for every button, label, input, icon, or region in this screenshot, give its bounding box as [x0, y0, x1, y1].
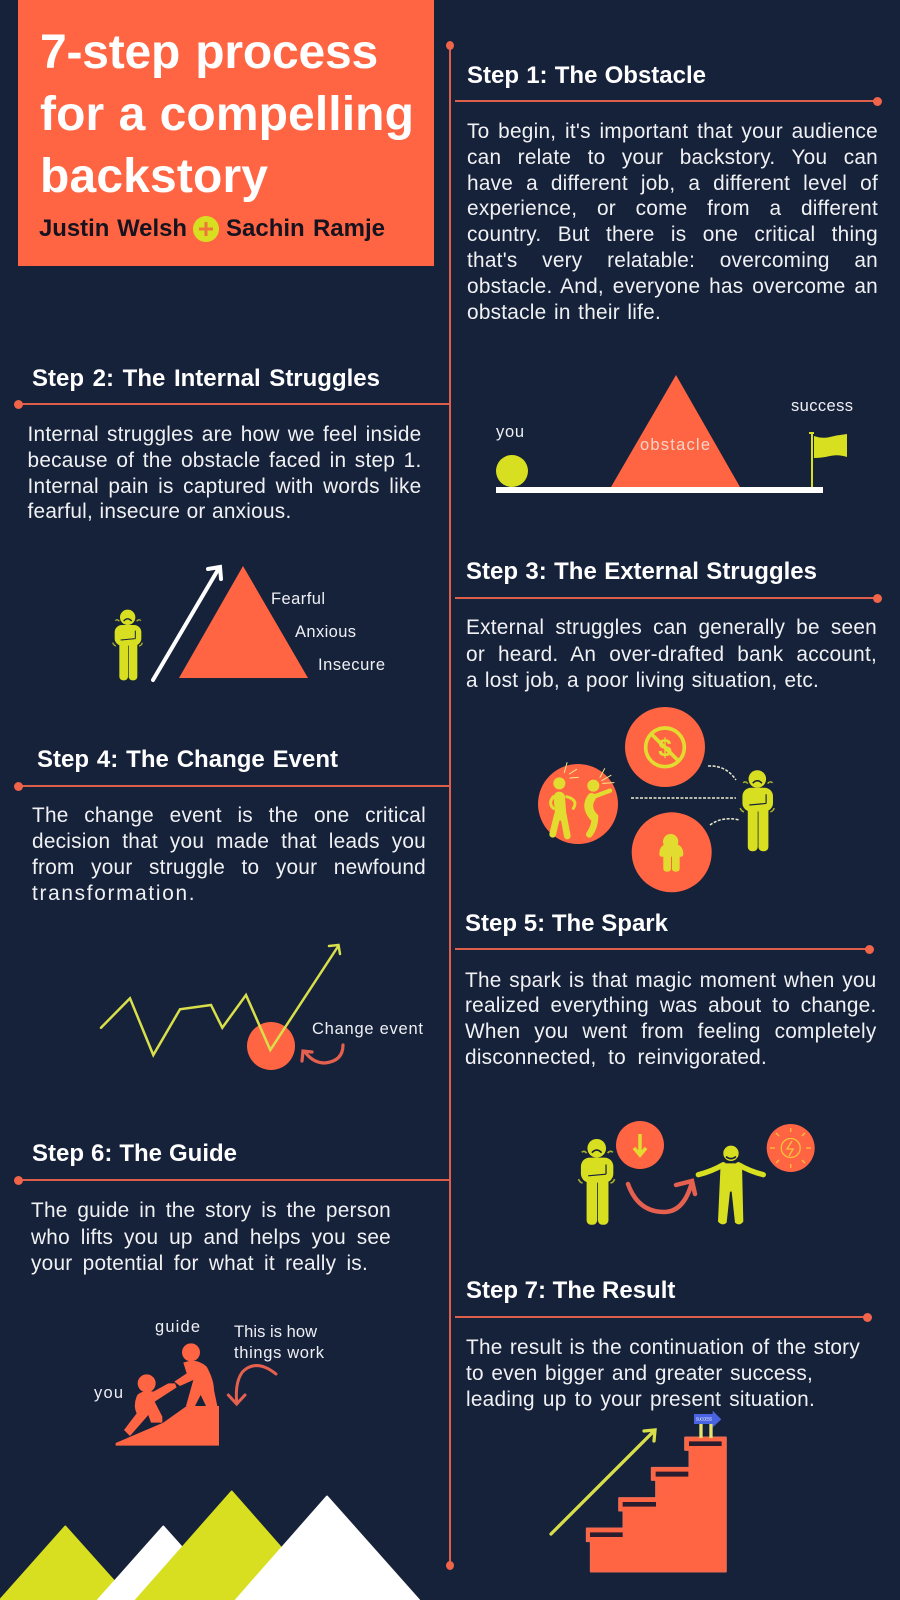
text: step 5 body: When you went from feeling completely	[465, 1020, 876, 1043]
triangle	[179, 566, 308, 678]
panel: step 3	[455, 558, 882, 892]
diagram: internal struggles	[112, 564, 385, 682]
figures climbing	[116, 1343, 219, 1446]
heading: step 1: Step 1: The Obstacle	[467, 62, 706, 89]
diagram: stairs	[549, 1410, 727, 1572]
ball: you	[496, 455, 528, 487]
arrow up	[551, 1430, 655, 1534]
text: step 2 body: because of the obstacle faced in step 1.	[28, 449, 422, 472]
stressed person	[740, 770, 774, 851]
text: step 4 body: The change event is the one critical	[32, 804, 426, 827]
diagram: change event chart	[100, 944, 423, 1070]
text: step 3 body	[466, 616, 877, 692]
heading: step 7: Step 7: The Result	[466, 1277, 675, 1304]
text: step 3 body: a lost job, a poor living situation, etc.	[466, 669, 819, 692]
label: obstacle: obstacle	[640, 436, 710, 454]
label: this is how things work	[234, 1323, 325, 1362]
text: step 1 body: can relate to your backstory. You can	[467, 146, 878, 169]
text: step 6 body: who lifts you up and helps you see	[31, 1226, 391, 1249]
diagram: spark	[578, 1121, 815, 1225]
text: step 4 body: decision that you made that leads you	[32, 830, 426, 853]
text: step 1 body: obstacle. And, everyone has overcome an	[467, 275, 878, 298]
curved arrow	[302, 1045, 343, 1063]
header banner	[18, 0, 434, 266]
label: fearful: Fearful	[271, 590, 325, 608]
flag	[809, 432, 847, 487]
label: change event: Change event	[312, 1020, 423, 1038]
panel: step 4	[14, 746, 449, 1070]
text: step 6 body	[31, 1199, 391, 1275]
label: you: you	[496, 423, 524, 441]
label: this is how things work: This is how	[234, 1323, 317, 1341]
change circle	[247, 1022, 295, 1070]
text: step 7 body	[466, 1336, 860, 1411]
heading: step 3: Step 3: The External Struggles	[466, 558, 817, 585]
author: Justin Welsh: Justin Welsh	[39, 215, 187, 242]
author: Sachin Ramje: Sachin Ramje	[226, 215, 385, 242]
diagram: obstacle	[496, 375, 853, 493]
text: step 1 body: To begin, it's important that your audience	[467, 120, 878, 143]
text: step 1 body: have a different job, a different level of	[467, 172, 878, 195]
label: guide: guide	[155, 1318, 200, 1336]
text: step 4 body	[32, 804, 426, 905]
text: step 6 body: The guide in the story is the person	[31, 1199, 391, 1222]
text: step 2 body	[28, 423, 422, 523]
obstacle triangle	[611, 375, 740, 487]
curved arrow	[228, 1366, 276, 1404]
text: step 7 body: leading up to your present situation.	[466, 1388, 815, 1411]
panel: step 7	[455, 1277, 872, 1572]
label: insecure: Insecure	[318, 656, 385, 674]
label: anxious: Anxious	[295, 623, 356, 641]
text: step 2 body: fearful, insecure or anxious.	[28, 500, 292, 523]
staircase	[587, 1437, 726, 1572]
text: step 3 body: External struggles can generally be seen	[466, 616, 877, 639]
stressed person	[578, 1139, 615, 1225]
title: 7-step process	[40, 26, 378, 79]
panel: step 5	[455, 910, 876, 1225]
success sign	[694, 1411, 721, 1438]
sun circle	[767, 1124, 815, 1172]
title: backstory	[40, 150, 268, 203]
title	[40, 26, 414, 203]
text: step 5 body	[465, 968, 876, 1069]
text: step 4 body: from your struggle to your newfound	[32, 856, 426, 879]
label: you: you	[94, 1384, 123, 1402]
heading: step 6: Step 6: The Guide	[32, 1140, 237, 1167]
curved arrow	[628, 1181, 695, 1212]
text: step 6 body: your potential for what it really is.	[31, 1252, 368, 1275]
text: step 1 body: country. But there is one critical thing	[467, 223, 878, 246]
text: step 1 body: experience, or come from a different	[467, 197, 878, 220]
label: this is how things work: things work	[234, 1344, 325, 1362]
dashed connectors	[631, 766, 740, 825]
text: step 7 body: The result is the continuation of the story	[466, 1336, 860, 1359]
label: success: success	[791, 397, 853, 415]
text: step 4 body: transformation.	[32, 882, 196, 905]
text: step 5 body: realized everything was about to change.	[465, 994, 876, 1017]
text: step 5 body: The spark is that magic moment when you	[465, 968, 876, 992]
text: step 1 body	[467, 120, 878, 324]
circle: no money: $	[658, 735, 672, 762]
text: step 1 body: obstacle in their life.	[467, 301, 661, 324]
success sign: SUCCESS	[696, 1417, 712, 1422]
heading: step 4: Step 4: The Change Event	[37, 746, 338, 773]
heading: step 2: Step 2: The Internal Struggles	[32, 365, 380, 392]
panel: step 1	[455, 62, 882, 493]
text: step 1 body: that's very relatable: overcoming an	[467, 249, 878, 272]
central timeline	[446, 41, 454, 1570]
title: for a compelling	[40, 88, 414, 141]
down arrow circle	[616, 1121, 664, 1169]
decorative mountains	[0, 1490, 420, 1600]
happy person	[698, 1146, 763, 1224]
diagram: external struggles	[538, 707, 775, 892]
circle: argument	[538, 763, 618, 844]
text: step 2 body: Internal struggles are how we feel inside	[28, 423, 422, 446]
diagram: guide	[94, 1318, 325, 1446]
panel: step 2	[14, 365, 449, 682]
circle: no money	[625, 707, 705, 787]
icon: plus badge	[193, 216, 219, 242]
text: step 3 body: or heard. An over-drafted bank account,	[466, 642, 877, 666]
circle: crouching person	[632, 812, 712, 892]
text: step 5 body: disconnected, to reinvigorated.	[465, 1046, 767, 1069]
stressed person	[113, 610, 142, 680]
text: step 7 body: to even bigger and greater success,	[466, 1362, 813, 1385]
ground line	[496, 487, 823, 493]
panel: step 6	[14, 1140, 449, 1446]
line chart	[101, 945, 340, 1055]
arrow up	[153, 567, 221, 680]
text: step 2 body: Internal pain is captured with words like	[28, 475, 422, 498]
heading: step 5: Step 5: The Spark	[465, 910, 668, 936]
